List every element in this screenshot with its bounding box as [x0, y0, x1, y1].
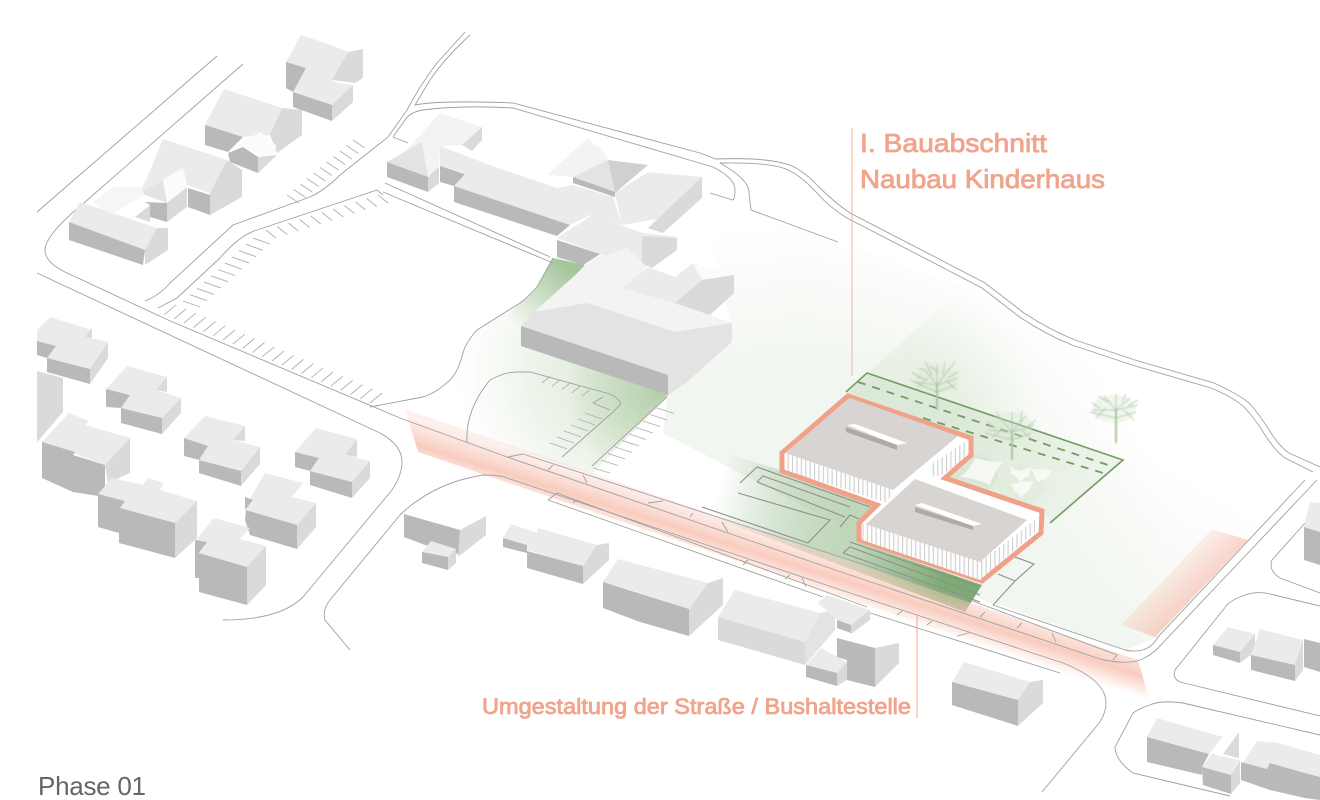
tree [910, 362, 958, 410]
green landscape areas [380, 165, 1290, 650]
building: main hall [521, 248, 734, 395]
house [195, 518, 266, 605]
south block facade [862, 523, 980, 580]
leader line to Bauabschnitt label [851, 128, 853, 376]
tree [1090, 394, 1138, 443]
house [952, 662, 1043, 726]
trees [910, 362, 1138, 460]
house [42, 413, 130, 497]
houses south of the street [404, 514, 1043, 726]
houses north-west [69, 35, 363, 265]
house [98, 478, 197, 558]
house [245, 473, 316, 549]
playground boundary [846, 373, 1123, 523]
house [93, 139, 242, 222]
north block roof [785, 398, 958, 490]
houses south-east [1147, 502, 1320, 800]
outline highlight [782, 396, 1042, 581]
house [37, 317, 108, 384]
parking stall ticks [164, 140, 674, 473]
building: long wing [440, 139, 702, 236]
building: middle block [557, 215, 677, 268]
leader line to street label [916, 616, 918, 718]
skylight south [915, 503, 982, 530]
small sail [1009, 466, 1031, 482]
pink street band [405, 409, 1150, 702]
house [404, 514, 486, 570]
houses west cluster [37, 317, 370, 605]
north block facade [785, 453, 893, 503]
label: street redesign: Umgestaltung der Straße / Bushaltestelle [482, 694, 911, 719]
south block roof [865, 479, 1027, 562]
new Kinderhaus building [782, 396, 1042, 581]
large sail [960, 458, 1003, 485]
house [286, 35, 363, 121]
path linework by the new building [702, 467, 1034, 605]
school complex [387, 113, 734, 395]
house [818, 595, 870, 634]
small sail [1031, 468, 1053, 483]
house [837, 638, 899, 687]
connector [930, 440, 968, 477]
house [1147, 718, 1239, 775]
house [295, 428, 370, 498]
house [69, 202, 168, 265]
label: Naubau Kinderhaus: Naubau Kinderhaus [860, 164, 1105, 194]
house [806, 648, 847, 686]
small sail [1010, 481, 1034, 498]
house [503, 524, 609, 584]
house [1202, 754, 1240, 794]
label: I. Bauabschnitt: I. Bauabschnitt [860, 128, 1048, 158]
building: left cross wing [387, 113, 482, 192]
house [1213, 627, 1255, 663]
skylight north [846, 424, 907, 450]
house [1241, 741, 1320, 800]
pink plaza at the east end [1121, 529, 1248, 637]
house [718, 590, 835, 665]
house [603, 559, 723, 636]
house [1304, 502, 1320, 565]
house [184, 416, 260, 486]
south block side [980, 520, 1035, 580]
house [1251, 629, 1320, 681]
house [205, 89, 302, 173]
tree [985, 411, 1036, 460]
play sails [960, 458, 1053, 498]
house cut by left margin [37, 371, 63, 442]
house [106, 366, 181, 434]
